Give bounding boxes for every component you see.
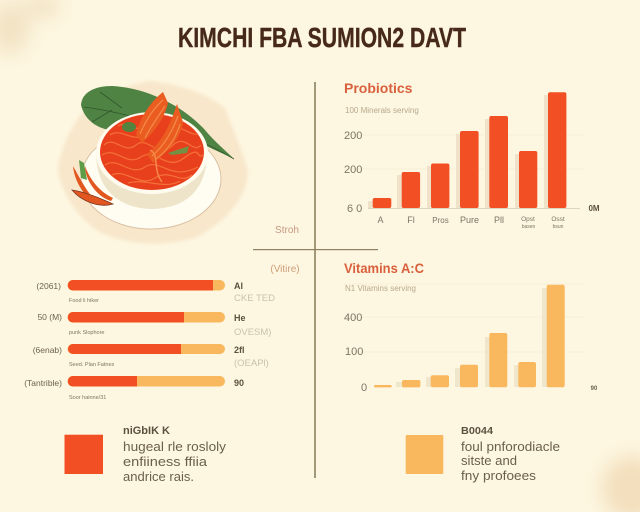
panel: probiotics chart xyxy=(344,80,600,230)
x axis labels: Osst xyxy=(551,216,565,223)
grid lines xyxy=(344,135,584,169)
bar shadows xyxy=(368,95,554,208)
small axis label: (Vitire) xyxy=(270,264,300,275)
kimchi xyxy=(100,92,204,190)
legend text xyxy=(461,439,560,483)
y axis labels: 100 xyxy=(345,346,363,358)
subheading: N1 Vitamins serving xyxy=(345,284,416,293)
legend heading: B0044 xyxy=(461,426,493,437)
legend text: hugeal rle rosloly xyxy=(123,439,227,454)
legend text: andrice rais. xyxy=(123,469,194,484)
swatch xyxy=(64,435,103,474)
y axis labels xyxy=(344,130,362,215)
bar row 3: (6enab) xyxy=(33,345,62,355)
bars xyxy=(374,285,565,387)
heading: Vitamins A:C xyxy=(344,260,424,276)
x axis labels: basen xyxy=(522,224,536,230)
bar row 2 xyxy=(37,312,271,338)
bowl xyxy=(96,152,207,209)
bar row 2: punk Slophore xyxy=(69,330,104,336)
panel: vitamins chart xyxy=(344,260,598,394)
y axis labels: 400 xyxy=(344,312,362,324)
small axis labels: Stroh xyxy=(275,225,299,236)
x axis labels: Pros xyxy=(432,216,449,225)
corner stain: bottom right xyxy=(602,456,640,512)
legend text: enfiiness ffiia xyxy=(123,454,208,469)
corner stain: top left xyxy=(0,0,60,54)
bar row 4: (Tantrible) xyxy=(24,378,62,388)
x axis labels: A xyxy=(377,215,384,225)
x axis labels: Pure xyxy=(460,215,479,225)
bars xyxy=(373,92,566,208)
bar row 1 xyxy=(36,280,275,304)
side strips xyxy=(72,160,113,205)
swatch xyxy=(406,435,443,474)
panel: horizontal bars xyxy=(24,280,275,401)
bar row 3: 2fl xyxy=(234,345,245,355)
y axis labels: 0 xyxy=(361,382,367,394)
x axis labels: bsun xyxy=(553,224,564,230)
x axis labels xyxy=(377,215,565,230)
stain behind bowl xyxy=(58,81,248,243)
legend text: fny profoees xyxy=(461,468,537,483)
legend text xyxy=(123,439,227,484)
leaf xyxy=(81,86,234,159)
bar row 1: Al xyxy=(234,281,243,291)
bar row 1: CKE TED xyxy=(234,293,275,304)
bar shadows xyxy=(396,288,550,387)
subheading: 100 Minerals serving xyxy=(345,106,419,115)
x axis labels: Pll xyxy=(494,215,504,225)
y axis labels: 200 xyxy=(344,164,362,176)
legend text: sitste and xyxy=(461,453,517,468)
upper strands xyxy=(136,92,168,143)
bar row 3: (OEAPl) xyxy=(234,358,269,369)
legend text: foul pnforodiacle xyxy=(461,439,560,454)
legend: red xyxy=(64,425,227,484)
grid lines xyxy=(344,284,584,352)
axis unit: 90 xyxy=(591,386,598,392)
legend heading: niGbIK K xyxy=(123,425,170,437)
illustration: kimchi bowl xyxy=(58,81,248,243)
x axis labels: Opst xyxy=(521,216,535,223)
bar row 3 xyxy=(33,344,269,369)
plate xyxy=(81,129,221,229)
bar row 4: 90 xyxy=(234,378,244,388)
bar row 2: OVESM) xyxy=(234,327,271,338)
y axis labels xyxy=(344,312,367,394)
axis cross xyxy=(253,82,378,478)
bar row 1: (2061) xyxy=(36,281,61,291)
baseline xyxy=(368,208,580,209)
heading: Probiotics xyxy=(344,80,413,96)
bar row 3: Seed. Plan Fatnes xyxy=(69,362,115,368)
bar row 4 xyxy=(24,376,244,401)
bar row 1: Food li hiker xyxy=(69,298,99,304)
x axis labels: Fl xyxy=(407,215,415,225)
bar row 2: He xyxy=(234,313,246,323)
bar row 4: Soor hainne/31 xyxy=(69,395,106,401)
axis unit: 0M xyxy=(588,204,600,213)
y axis labels: 6 0 xyxy=(347,203,362,215)
green garnish xyxy=(122,122,136,132)
bar row 2: 50 (M) xyxy=(37,312,62,322)
y axis labels: 200 xyxy=(344,130,362,142)
legend: yellow xyxy=(406,426,560,483)
title: KIMCHI FBA SUMION2 DAVT xyxy=(178,22,466,53)
